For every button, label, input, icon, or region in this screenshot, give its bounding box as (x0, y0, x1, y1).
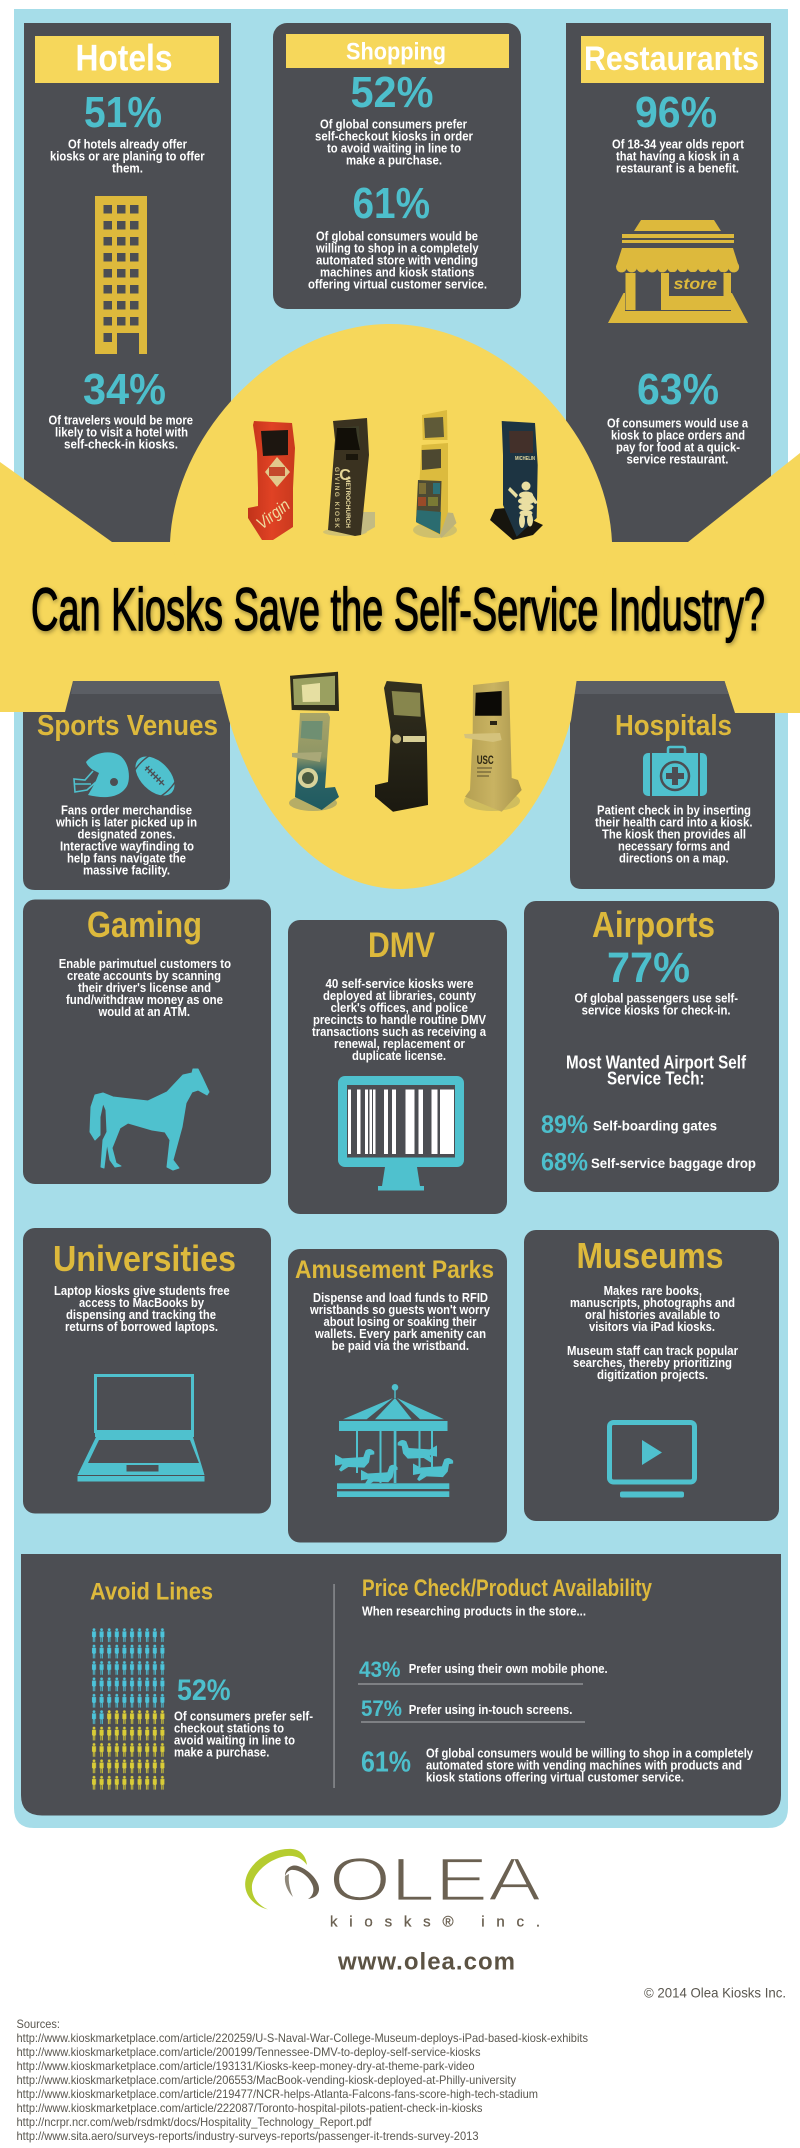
sources list: http://www.kioskmarketplace.com/article/193131/Kiosks-keep-money-dry-at-theme-park-video (16, 2059, 475, 2073)
text: amusement parks: be paid via the wristband. (332, 1338, 469, 1353)
text: airports check-in: Of global passengers use self- (574, 990, 738, 1006)
icon: football helmet and ball (74, 749, 182, 803)
stat: 52%: 52% (177, 1674, 231, 1707)
text: museums: digitization projects. (597, 1367, 708, 1382)
text: museums: oral histories available to (585, 1307, 720, 1322)
stat: 68% baggage drop: 68% (541, 1148, 588, 1176)
stat: 52%: 52% (350, 68, 434, 117)
stat: 51%: 51% (84, 88, 162, 137)
text: self-checkout stations: make a purchase. (174, 1744, 269, 1760)
text: automated store: automated store with vending (316, 252, 478, 268)
text: hospitals: their health card into a kiosk. (595, 814, 752, 830)
panel: sports venues (23, 681, 230, 890)
text: self-checkout stations (174, 1708, 313, 1760)
text: automated store: machines and kiosk stations (320, 264, 474, 280)
text: sports venues: Interactive wayfinding to (60, 838, 194, 854)
heading: shopping: Shopping (346, 38, 446, 66)
subheading: most wanted tech: Most Wanted Airport Self (566, 1052, 747, 1072)
text: 18-34 year olds: restaurant is a benefit. (616, 160, 739, 176)
stat: 96%: 96% (635, 88, 717, 137)
kiosk: yellow poster (413, 410, 457, 538)
text: consumers: kiosk to place orders and (611, 428, 745, 442)
text: consumers (607, 416, 749, 466)
panel: museums (524, 1230, 779, 1521)
kiosk: dark giving kiosk: C (339, 467, 351, 484)
text: amusement parks: wallets. Every park amenity can (314, 1326, 486, 1341)
heading: price check: Price Check/Product Availability (362, 1575, 653, 1602)
text: museums: searches, thereby prioritizing (573, 1355, 732, 1370)
panel: universities (23, 1228, 271, 1514)
text: travelers: Of travelers would be more (48, 412, 193, 428)
stat: 61% automated store: automated store with vending machines with products and (426, 1758, 742, 1772)
text: hospitals: Patient check in by inserting (597, 802, 751, 818)
subheading: most wanted tech (566, 1052, 747, 1088)
text: consumers: Of consumers would use a (607, 416, 749, 430)
text: airports check-in: service kiosks for check-in. (582, 1002, 731, 1018)
stat: 57% in-touch screens: Prefer using in-touch screens. (409, 1702, 572, 1717)
text: hotels offering kiosks: Of hotels already offer (68, 136, 187, 152)
text: gaming: their driver's license and (78, 980, 211, 995)
sources list: http://www.kioskmarketplace.com/article/222087/Toronto-hospital-pilots-patient-check-in-kiosks (16, 2101, 482, 2115)
stat: 89% self-boarding gates: 89% (541, 1111, 588, 1139)
heading: hospitals: Hospitals (615, 710, 732, 742)
sources list: http://www.kioskmarketplace.com/article/200199/Tennessee-DMV-to-deploy-self-service-kiosks (16, 2045, 480, 2059)
text: hospitals (595, 802, 752, 866)
heading: museums: Museums (576, 1235, 724, 1276)
text: hotels offering kiosks: them. (112, 160, 143, 176)
stat: 68% baggage drop (541, 1148, 756, 1176)
heading: hotels: Hotels (76, 38, 172, 78)
sources list: http://ncrpr.ncr.com/web/rsdmkt/docs/Hospitality_Technology_Report.pdf (16, 2115, 372, 2129)
website: www.olea.com (337, 1948, 515, 1976)
text: hospitals: necessary forms and (618, 838, 730, 854)
text: self-checkout: Of global consumers prefer (320, 116, 467, 132)
text: hotels offering kiosks (50, 136, 205, 176)
text: 18-34 year olds: that having a kiosk in a (616, 148, 740, 164)
yellow central hill (170, 324, 612, 889)
stat: 57% in-touch screens (361, 1696, 572, 1721)
sources list: http://www.kioskmarketplace.com/article/206553/MacBook-vending-kiosk-deployed-at-Philly-university (16, 2073, 516, 2087)
text: DMV: duplicate license. (352, 1048, 446, 1063)
text: sports venues: massive facility. (83, 862, 170, 878)
heading: gaming: Gaming (87, 904, 202, 945)
kiosks: bottom row (289, 672, 522, 812)
icon: hotel building (95, 196, 147, 354)
subheading: researching: When researching products in the store... (362, 1604, 586, 1618)
text: gaming: would at an ATM. (98, 1004, 190, 1019)
icon: laptop (78, 1376, 204, 1482)
stat: 57% in-touch screens: 57% (361, 1696, 402, 1721)
text: museums: manuscripts, photographs and (570, 1295, 735, 1310)
icon: video screen (610, 1422, 694, 1498)
text: sports venues: which is later picked up in (55, 814, 197, 830)
kiosk: red Virgin (248, 421, 295, 540)
text: DMV: 40 self-service kiosks were (326, 976, 474, 991)
stat: 68% baggage drop: Self-service baggage drop (591, 1155, 756, 1171)
heading: shopping (286, 34, 509, 68)
stat: 61% automated store (361, 1746, 754, 1784)
icon: barcode monitor (338, 1076, 464, 1190)
kiosk: gold USC: USC (477, 753, 494, 767)
text: universities: returns of borrowed laptops. (65, 1319, 218, 1334)
panel: shopping (273, 23, 521, 309)
text: 18-34 year olds (612, 136, 745, 176)
icon: first aid case (643, 747, 707, 796)
heading: hotels (35, 36, 219, 83)
text: amusement parks: wristbands so guests won't worry (309, 1302, 491, 1317)
text: automated store: offering virtual customer service. (308, 276, 487, 292)
text: hospitals: directions on a map. (619, 850, 729, 866)
heading: avoid lines: Avoid Lines (90, 1578, 213, 1606)
text: universities (54, 1283, 230, 1334)
text: travelers: likely to visit a hotel with (55, 424, 188, 440)
panel: restaurants (566, 23, 771, 542)
kiosk: red Virgin: Virgin (253, 495, 294, 533)
yellow title band (0, 453, 800, 713)
text: sports venues: designated zones. (78, 826, 176, 842)
text: kiosks inc.: kiosks® inc. (330, 1914, 540, 1930)
text: travelers (48, 412, 193, 452)
text: self-checkout (315, 116, 473, 168)
heading: amusement parks: Amusement Parks (295, 1256, 494, 1284)
kiosk: monitor-topped teal (289, 672, 339, 811)
text: gaming: create accounts by scanning (67, 968, 221, 983)
text: sports venues: help fans navigate the (67, 850, 186, 866)
stat: 43% mobile phone: Prefer using their own mobile phone. (409, 1661, 608, 1676)
chart: people pictogram 52% (91, 1628, 167, 1792)
heading: DMV: DMV (368, 926, 436, 965)
text: airports check-in (574, 990, 738, 1018)
logo: Olea Kiosks (245, 1846, 541, 1930)
text: DMV: renewal, replacement or (334, 1036, 465, 1051)
heading: restaurants: Restaurants (584, 40, 759, 78)
sources list: http://www.kioskmarketplace.com/article/220259/U-S-Naval-War-College-Museum-deploys-iPad-based-kiosk-exhibits (16, 2031, 588, 2045)
text: consumers: pay for food at a quick- (616, 440, 740, 454)
kiosk: navy Michelin (490, 421, 543, 540)
text: amusement parks: about losing or soaking their (324, 1314, 476, 1329)
stat: 43% mobile phone: 43% (359, 1657, 400, 1682)
text: self-checkout: to avoid waiting in line to (327, 140, 461, 156)
panel: hospitals (570, 681, 775, 889)
text: DMV: transactions such as receiving a (312, 1024, 487, 1039)
stat: 61% automated store: 61% (361, 1746, 411, 1778)
stat: 34%: 34% (83, 365, 166, 414)
stat: 89% self-boarding gates: Self-boarding gates (593, 1118, 717, 1134)
text: sports venues: Fans order merchandise (61, 802, 192, 818)
sources list (16, 2017, 588, 2143)
text: automated store (308, 228, 487, 292)
text: hotels offering kiosks: kiosks or are planing to offer (50, 148, 205, 164)
text: self-checkout stations: checkout stations to (174, 1720, 284, 1736)
kiosk: dark giving kiosk (323, 418, 375, 536)
text: automated store: Of global consumers would be (316, 228, 478, 244)
heading: sports venues: Sports Venues (37, 710, 218, 742)
text: universities: dispensing and tracking the (66, 1307, 216, 1322)
text: consumers: service restaurant. (626, 452, 728, 466)
text: gaming (59, 956, 231, 1019)
text: gaming: fund/withdraw money as one (66, 992, 223, 1007)
sources list: http://www.kioskmarketplace.com/article/219477/NCR-helps-Atlanta-Falcons-fans-score-high-tech-stadium (16, 2087, 538, 2101)
text: self-checkout stations: Of consumers prefer self- (174, 1708, 313, 1724)
text: self-checkout stations: avoid waiting in line to (174, 1732, 295, 1748)
heading: universities: Universities (53, 1238, 236, 1279)
text: 18-34 year olds: Of 18-34 year olds report (612, 136, 745, 152)
stat: 63%: 63% (637, 365, 719, 414)
kiosks: top row (248, 410, 543, 540)
text: DMV: clerk's offices, and police (331, 1000, 468, 1015)
stat: 61% automated store: kiosk stations offering virtual customer service. (426, 1770, 684, 1784)
text: hospitals: The kiosk then provides all (602, 826, 746, 842)
kiosk: dark giving kiosk: METROCHURCH (344, 477, 351, 528)
text: sports venues (55, 802, 197, 878)
text: museums: visitors via iPad kiosks. (589, 1319, 715, 1334)
stat: 77%: 77% (607, 944, 690, 992)
text: universities: Laptop kiosks give students free (54, 1283, 230, 1298)
icon: horse (90, 1069, 209, 1170)
panel: hotels (24, 23, 231, 542)
stat: 43% mobile phone (359, 1657, 608, 1682)
panel: DMV (288, 920, 507, 1214)
text: amusement parks: Dispense and load funds to RFID (313, 1290, 488, 1305)
copyright: © 2014 Olea Kiosks Inc. (644, 1984, 786, 2000)
text: museums (567, 1283, 738, 1382)
text: DMV: precincts to handle routine DMV (313, 1012, 486, 1027)
text: DMV: deployed at libraries, county (323, 988, 477, 1003)
icon: logo swoosh (245, 1849, 319, 1910)
stat: 61% automated store: Of global consumers would be willing to shop in a completely (426, 1746, 754, 1760)
panel: amusement parks (288, 1249, 507, 1542)
text: museums: Makes rare books, (604, 1283, 702, 1298)
kiosk: black (375, 681, 428, 812)
stat: 61%: 61% (352, 179, 430, 228)
sources list: Sources: (16, 2017, 60, 2031)
panel: gaming (23, 900, 271, 1184)
icon: store: store (674, 276, 717, 293)
kiosk: navy Michelin: MICHELIN (515, 456, 535, 462)
text: DMV (312, 976, 487, 1063)
stat: 89% self-boarding gates (541, 1111, 717, 1139)
text: museums: Museum staff can track popular (567, 1343, 738, 1358)
text: automated store: willing to shop in a completely (315, 240, 479, 256)
text: gaming: Enable parimutuel customers to (59, 956, 231, 971)
text: universities: access to MacBooks by (79, 1295, 205, 1310)
text: travelers: self-check-in kiosks. (64, 436, 178, 452)
sources list: http://www.sita.aero/surveys-reports/industry-surveys-reports/passenger-it-trends-survey-2013 (16, 2129, 479, 2143)
icon: carousel (335, 1384, 453, 1497)
panel: airports (524, 901, 779, 1192)
icon: store (608, 220, 748, 323)
heading: airports: Airports (592, 904, 715, 945)
kiosk: dark giving kiosk: GIVING KIOSK (333, 467, 340, 528)
text: self-checkout: self-checkout kiosks in order (315, 128, 473, 144)
subheading: most wanted tech: Service Tech: (607, 1068, 705, 1088)
panel: bottom stats (21, 1554, 781, 1816)
text: amusement parks (309, 1290, 491, 1353)
text: OLEA: OLEA (329, 1846, 541, 1914)
text: self-checkout: make a purchase. (346, 152, 442, 168)
kiosk: gold USC (464, 681, 522, 812)
